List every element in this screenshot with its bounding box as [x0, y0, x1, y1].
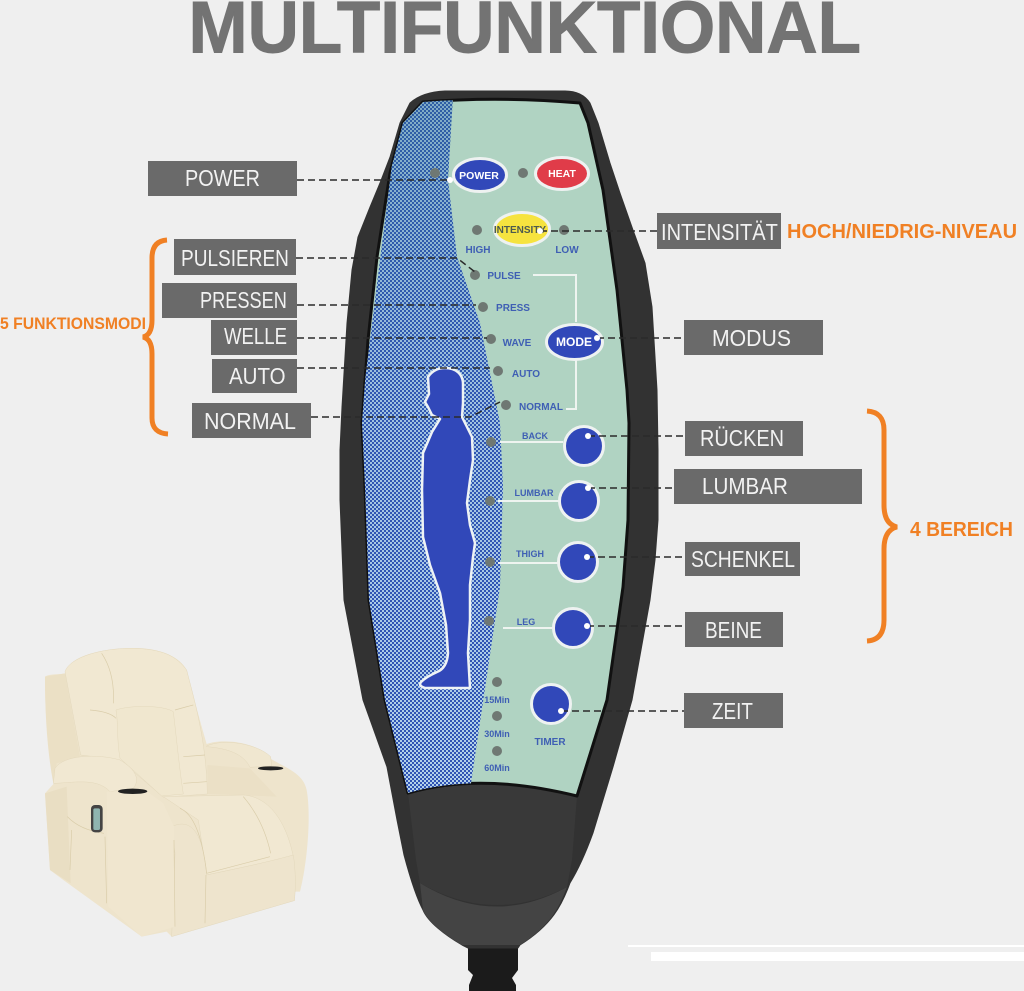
panel labels: [466, 245, 579, 773]
panel labels: WAVE: [503, 338, 532, 349]
panel labels: LUMBAR: [514, 488, 554, 498]
label: POWER: POWER: [185, 166, 260, 191]
callout: 4 zones: 4 BEREICH: [910, 519, 1013, 541]
dashed leader lines: [296, 177, 685, 714]
label: MODUS: [684, 320, 823, 355]
body silhouette: [420, 368, 475, 688]
remote body: [340, 91, 658, 948]
panel labels: LEG: [517, 617, 535, 627]
label: NORMAL: NORMAL: [204, 408, 296, 434]
chair lumbar cushion: [116, 706, 183, 796]
label: MODUS: MODUS: [712, 325, 791, 351]
label: SCHENKEL: [685, 542, 800, 576]
panel labels: NORMAL: [519, 402, 563, 413]
power button: [454, 158, 506, 192]
label: ZEIT: [684, 693, 783, 728]
mode button: [546, 324, 602, 360]
label: PRESSEN: PRESSEN: [200, 288, 287, 314]
panel: mint face: [362, 99, 629, 796]
callout: intensity levels: HOCH/NIEDRIG-NIVEAU: [787, 221, 1017, 243]
guide lines: [498, 275, 576, 628]
label: WELLE: [211, 320, 297, 355]
remote lower highlight: [420, 883, 567, 945]
label: INTENSITÄT: INTENSITÄT: [661, 219, 778, 245]
remote in pocket: [91, 805, 103, 832]
label: LUMBAR: [674, 469, 862, 504]
label: AUTO: AUTO: [229, 363, 286, 389]
label: BEINE: BEINE: [705, 618, 762, 643]
remote cord: [468, 940, 518, 991]
panel labels: AUTO: [512, 369, 540, 380]
indicator leds: [430, 168, 569, 756]
panel labels: PULSE: [487, 271, 521, 282]
remote lower cap: [408, 783, 577, 905]
label: POWER: [148, 161, 297, 196]
panel labels: 60Min: [484, 763, 510, 773]
label: PRESSEN: [162, 283, 297, 318]
mode button: MODE: [556, 335, 592, 349]
chair back wing: [45, 673, 80, 783]
right brace: [867, 411, 897, 641]
chair front: [172, 824, 295, 937]
label: BEINE: [685, 612, 783, 647]
label: RÜCKEN: [685, 421, 803, 456]
chair side shade: [45, 787, 71, 883]
chair left arm: [53, 756, 137, 792]
chair silhouette: [45, 648, 309, 937]
label: INTENSITÄT: [657, 213, 781, 249]
chair right arm: [207, 742, 272, 767]
heat button: HEAT: [548, 168, 576, 180]
label: SCHENKEL: SCHENKEL: [691, 547, 795, 572]
label: NORMAL: [192, 403, 311, 438]
panel labels: LOW: [555, 245, 579, 256]
label: RÜCKEN: RÜCKEN: [700, 426, 784, 451]
panel labels: 30Min: [484, 729, 510, 739]
heat button: [536, 158, 588, 190]
chair seat cushion: [163, 795, 293, 875]
label: PULSIEREN: PULSIEREN: [181, 246, 289, 271]
panel labels: TIMER: [534, 737, 566, 748]
power button: POWER: [459, 170, 499, 182]
label: LUMBAR: LUMBAR: [702, 473, 788, 499]
label: ZEIT: ZEIT: [712, 699, 753, 724]
chair right side panel: [207, 765, 277, 797]
left brace: [143, 240, 168, 434]
panel labels: PRESS: [496, 303, 530, 314]
remote control: [340, 91, 658, 991]
label: AUTO: [212, 359, 297, 393]
recliner chair: [45, 648, 309, 937]
intensity button: [494, 212, 550, 246]
chair cup holders: [118, 766, 283, 794]
bottom white bars: [628, 945, 1024, 961]
intensity button: INTENSITY: [494, 225, 546, 236]
callout: 5 modes: 5 FUNKTIONSMODI: [0, 314, 146, 333]
panel labels: HIGH: [466, 245, 490, 256]
label: WELLE: WELLE: [224, 324, 287, 350]
panel: blue halftone: [350, 96, 503, 800]
panel labels: THIGH: [516, 549, 544, 559]
label: PULSIEREN: [174, 239, 296, 275]
chair fold lines: [67, 653, 271, 927]
massage zone buttons: [532, 426, 604, 724]
panel labels: 15Min: [484, 695, 510, 705]
panel labels: BACK: [522, 431, 548, 441]
chair backrest: [65, 648, 207, 797]
chair left front: [107, 790, 175, 937]
